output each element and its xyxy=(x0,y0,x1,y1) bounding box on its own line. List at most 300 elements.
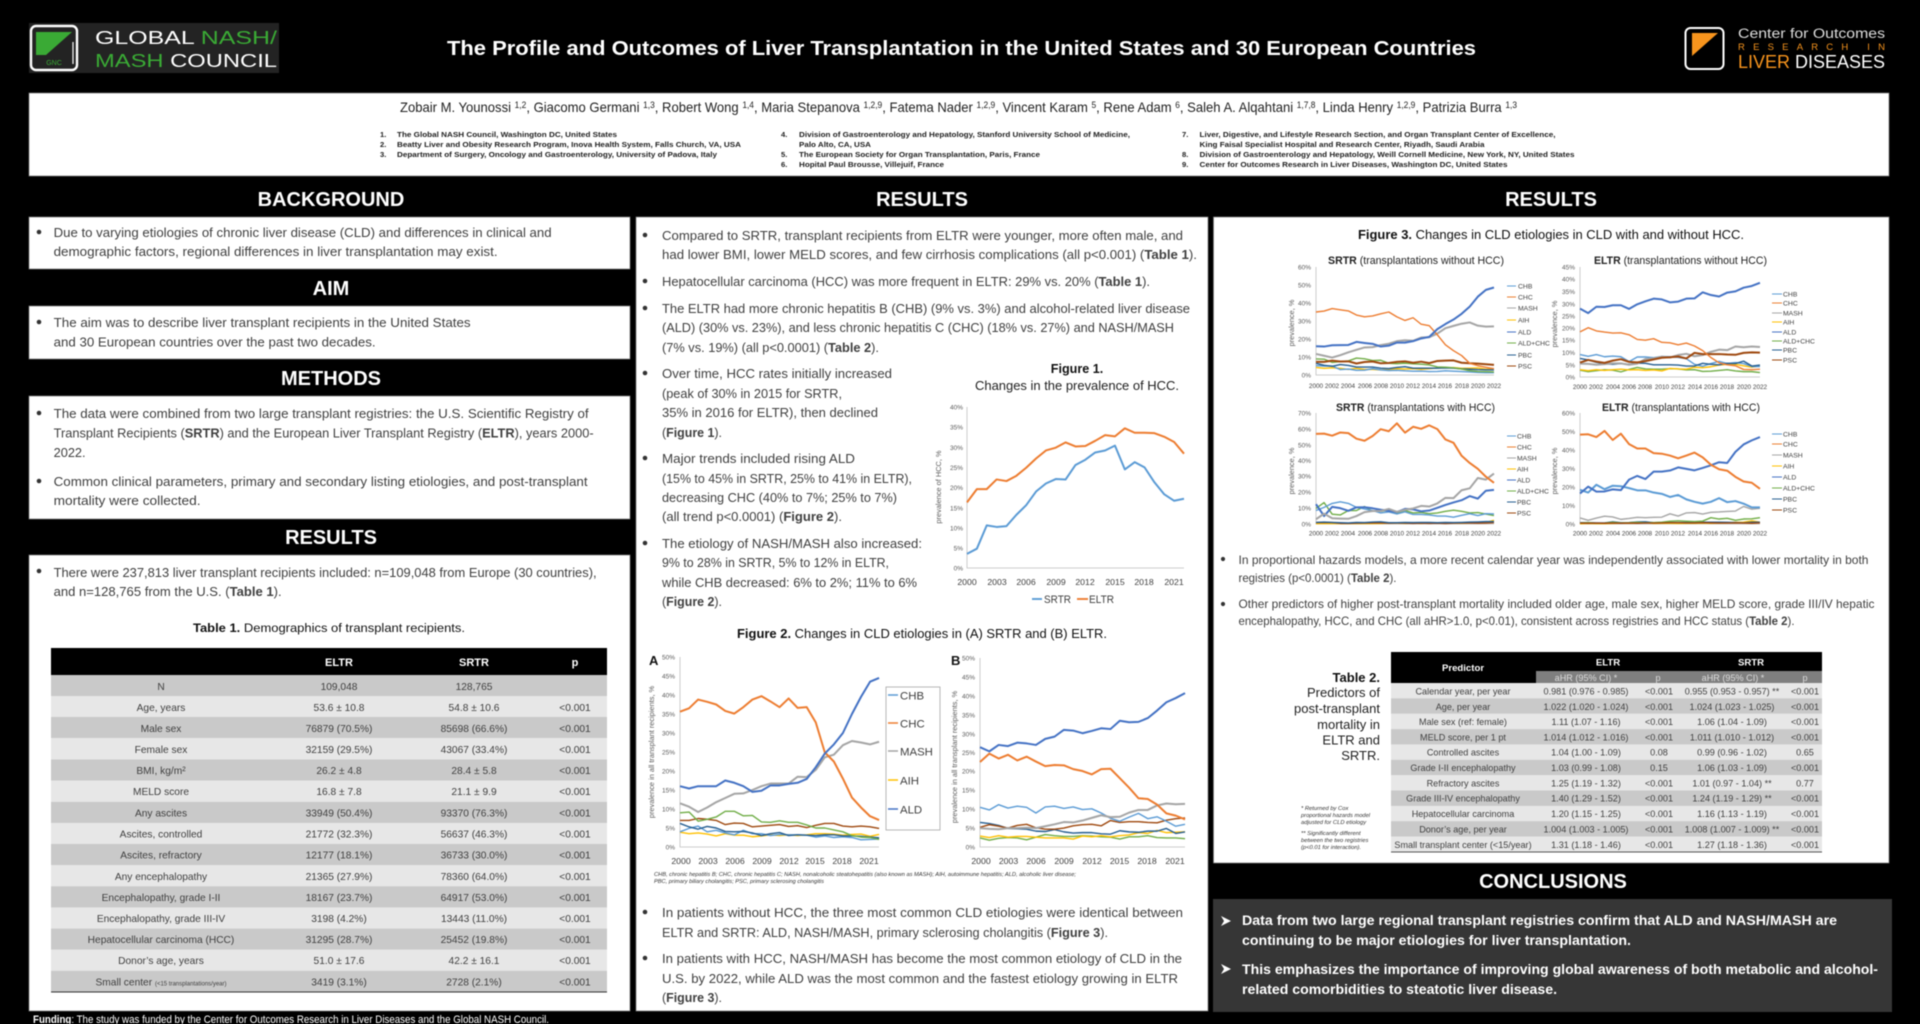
chart: figure 2B ELTR: 10% xyxy=(962,806,975,814)
authors: 1,2,9 xyxy=(864,100,882,110)
chart: SRTR with HCC: 2008 xyxy=(1374,530,1389,538)
panel: methods xyxy=(29,396,630,519)
chart: SRTR without HCC: 10% xyxy=(1298,354,1311,362)
table 1: demographics: Hepatocellular carcinoma (HCC) xyxy=(88,935,234,946)
line: MASH xyxy=(980,804,1185,829)
line: PBC xyxy=(1580,358,1760,366)
legend: PSC xyxy=(1783,508,1797,514)
table 1: demographics: 93370 (76.3%) xyxy=(441,808,507,820)
legend: figure 2: MASH xyxy=(900,746,933,758)
legend: ALD xyxy=(1517,478,1530,484)
chart: SRTR with HCC: SRTR (transplantations with HCC) xyxy=(1336,402,1495,414)
chart: ELTR with HCC: 2006 xyxy=(1622,530,1637,538)
legend: figure 2: CHC xyxy=(900,718,925,730)
legend: PBC xyxy=(1783,348,1797,354)
table 1: demographics: 76879 (70.5%) xyxy=(306,724,372,735)
heading: methods: METHODS xyxy=(281,368,381,390)
table 2 title: ELTR and xyxy=(1322,732,1380,748)
chart: figure 2B ELTR: 5% xyxy=(966,826,975,832)
chart: SRTR with HCC: 2000 xyxy=(1309,530,1324,538)
authors: , Maria Stepanova xyxy=(754,99,864,115)
text block: trends bullets: (all trend p<0.0001) (Figure 2). xyxy=(662,509,842,524)
table 2: predictors of mortality: <0.001 xyxy=(1645,686,1673,696)
table 1: demographics: Ascites, controlled xyxy=(120,830,203,840)
line: CHB xyxy=(1316,366,1494,373)
chart: SRTR with HCC: 2002 xyxy=(1325,530,1340,538)
chart: SRTR with HCC: 2006 xyxy=(1358,530,1373,538)
line: PBC xyxy=(1316,363,1494,370)
line: PSC xyxy=(680,818,879,828)
panel: conclusions: This emphasizes the importance of improving global awareness of both metabolic and alcohol- xyxy=(1242,962,1878,977)
affiliations column 2: Division of Gastroenterology and Hepatology, Stanford University School of Medicine, xyxy=(799,130,1130,139)
panel: aim xyxy=(29,306,630,359)
table 1: demographics: <0.001 xyxy=(559,808,591,820)
table 1: demographics: 26.2 ± 4.8 xyxy=(316,766,362,777)
figure 2 footnote xyxy=(654,872,1076,885)
heading: aim: AIM xyxy=(313,278,349,300)
chart: figure 2B ELTR: 40% xyxy=(962,694,975,700)
chart: ELTR without HCC: 2014 xyxy=(1688,384,1703,391)
panel: conclusions: continuing to be major etiologies for liver transplantation. xyxy=(1242,933,1631,948)
chart: figure 2B ELTR: 2015 xyxy=(1110,856,1129,866)
chart: figure 1 HCC prevalence: 35% xyxy=(950,424,963,432)
authors: , Saleh A. Alqahtani xyxy=(1180,99,1297,115)
line: ALD xyxy=(680,678,879,792)
chart: SRTR without HCC: 2018 xyxy=(1455,383,1470,390)
table 2: predictors of mortality: 1.03 (0.99 - 1.08) xyxy=(1551,763,1621,773)
chart: figure 2A SRTR: 2006 xyxy=(725,856,745,866)
legend: CHC xyxy=(1783,300,1798,308)
text block: comparison bullets xyxy=(643,228,1197,355)
table 1: demographics: Donor’s age, years xyxy=(118,956,204,967)
table 2: predictors of mortality: 0.99 (0.96 - 1.02) xyxy=(1697,748,1767,758)
line: AIH xyxy=(980,830,1185,839)
authors: 1,3 xyxy=(1505,100,1517,110)
table 2: predictors of mortality: <0.001 xyxy=(1791,824,1819,834)
line: ALD+CHC xyxy=(1580,367,1760,373)
table 1: demographics: <0.001 xyxy=(559,978,591,988)
chart: ELTR with HCC: 0% xyxy=(1566,522,1575,528)
chart: figure 1 HCC prevalence: 2015 xyxy=(1105,577,1125,587)
table 2: predictors of mortality: 1.40 (1.29 - 1.52) xyxy=(1551,794,1621,804)
authors: , Giacomo Germani xyxy=(526,99,643,115)
table 2: predictors of mortality: 1.011 (1.010 - 1.012) xyxy=(1690,732,1774,742)
table 1: demographics: 25452 (19.8%) xyxy=(441,935,507,946)
chart: SRTR without HCC: 60% xyxy=(1298,264,1311,272)
table 2: predictors of mortality: 1.24 (1.19 - 1.29) ** xyxy=(1692,794,1772,804)
table 1: demographics: 109,048 xyxy=(321,682,358,693)
line: PBC xyxy=(680,823,879,838)
panel: methods: 2022. xyxy=(54,445,86,460)
table 2: predictors of mortality: 1.25 (1.19 - 1.32) xyxy=(1551,778,1621,788)
table 2: predictors of mortality: <0.001 xyxy=(1791,702,1819,712)
authors: , Robert Wong xyxy=(655,99,742,115)
authors: 1,4 xyxy=(742,100,754,110)
line: AIH xyxy=(1580,364,1760,371)
chart: figure 2A SRTR: 25% xyxy=(662,750,675,756)
line: ALD+CHC xyxy=(1580,518,1760,523)
legend: PSC xyxy=(1518,364,1532,370)
chart: figure 2B ELTR: 20% xyxy=(962,768,975,776)
table 2: predictors of mortality: 1.06 (1.03 - 1.09) xyxy=(1697,763,1767,773)
table 2 notes: proportional hazards model xyxy=(1300,813,1371,819)
line: PSC xyxy=(1580,522,1760,524)
chart: SRTR with HCC: 2022 xyxy=(1487,530,1502,538)
chart: figure 1 HCC prevalence: 15% xyxy=(950,506,963,512)
text block: proportional hazards bullets: encephalopathy, HCC, and CHC (all aHR>1.0, p<0.01), consistent across registries and HCC status (Table 2). xyxy=(1238,615,1794,628)
table 2: predictors of mortality: 1.01 (0.97 - 1.04) ** xyxy=(1692,778,1772,788)
table 2: predictors of mortality: MELD score, per 1 pt xyxy=(1420,732,1506,742)
table 2 notes xyxy=(1300,806,1371,851)
panel: results left xyxy=(29,555,630,1011)
table 1: demographics: 21365 (27.9%) xyxy=(306,872,372,883)
table 1: demographics: Female sex xyxy=(135,745,187,756)
line: MASH xyxy=(1316,474,1494,519)
authors: 5 xyxy=(1091,100,1096,110)
heading: results middle: RESULTS xyxy=(876,189,968,211)
authors: 6 xyxy=(1175,100,1180,110)
table 1: demographics: 28.4 ± 5.8 xyxy=(451,766,497,777)
affiliations column 3: Center for Outcomes Research in Liver Diseases, Washington DC, United States xyxy=(1200,160,1508,169)
figure 2 footnote: CHB, chronic hepatitis B; CHC, chronic hepatitis C; NASH, nonalcoholic steatohepatitis (also known as MASH); AIH, autoimmune hepatitis; ALD, alcoholic liver disease; xyxy=(654,872,1076,878)
chart: SRTR without HCC: SRTR (transplantations without HCC) xyxy=(1328,255,1504,267)
table 1: demographics: Age, years xyxy=(137,703,185,714)
chart: SRTR without HCC: 30% xyxy=(1298,318,1311,326)
authors: 1,2,9 xyxy=(977,100,995,110)
chart: ELTR with HCC: 60% xyxy=(1562,410,1575,418)
table 1: demographics: 54.8 ± 10.6 xyxy=(449,703,500,714)
legend: PBC xyxy=(1517,500,1531,506)
table 1 title: Table 1. Demographics of transplant recipients. xyxy=(193,621,465,635)
legend: ALD xyxy=(1783,474,1796,482)
text block: HCC etiology bullets: In patients with HCC, NASH/MASH has become the most common etiology of CLD in the xyxy=(662,951,1182,966)
chart: ELTR without HCC: 15% xyxy=(1562,338,1575,344)
chart: ELTR without HCC: 0% xyxy=(1566,374,1575,382)
table 1: demographics: 33949 (50.4%) xyxy=(306,808,372,820)
table 2 notes: adjusted for CLD etiology xyxy=(1301,820,1367,826)
table 2: predictors of mortality: <0.001 xyxy=(1791,717,1819,727)
line: MASH xyxy=(1580,506,1760,520)
line: PSC xyxy=(1580,352,1760,363)
chart: ELTR without HCC: 2022 xyxy=(1753,384,1768,391)
panel: methods: The data were combined from two large transplant registries: the U.S. Scientific Registry of xyxy=(54,406,589,421)
table 1: demographics: <0.001 xyxy=(559,935,591,946)
text block: proportional hazards bullets: In proportional hazards models, a more recent calendar year was independently associated with lower mortality in both xyxy=(1238,554,1868,567)
affiliations column 1: Department of Surgery, Oncology and Gastroenterology, University of Padova, Italy xyxy=(397,150,718,159)
legend: MASH xyxy=(1783,452,1803,460)
affiliations column 2 xyxy=(781,130,1130,169)
text block: HCC etiology bullets: ELTR and SRTR: ALD, NASH/MASH, primary sclerosing cholangitis (Figure 3). xyxy=(662,925,1108,940)
legend: ALD+CHC xyxy=(1783,486,1815,492)
legend xyxy=(1507,284,1550,370)
legend: figure 1 xyxy=(1032,594,1114,606)
chart: ELTR without HCC: 2006 xyxy=(1622,384,1637,391)
title: The Profile and Outcomes of Liver Transplantation in the United States and 30 European Countries xyxy=(447,37,1476,60)
table 1: demographics: SRTR xyxy=(459,657,489,669)
table 2 notes: between the two registries xyxy=(1301,838,1368,844)
chart: figure 2B ELTR: 2000 xyxy=(971,856,991,866)
table 1: demographics: <0.001 xyxy=(559,830,591,840)
affiliations column 3 xyxy=(1182,130,1574,169)
legend: AIH xyxy=(1783,464,1794,470)
table 2: predictors of mortality: <0.001 xyxy=(1791,840,1819,850)
legend: MASH xyxy=(1518,306,1538,312)
chart: figure 2B ELTR: B xyxy=(951,653,960,668)
legend: figure 1: ELTR xyxy=(1089,594,1114,606)
table 2: predictors of mortality: Hepatocellular carcinoma xyxy=(1412,809,1515,819)
chart: ELTR with HCC: 2008 xyxy=(1638,530,1653,538)
chart: figure 2A SRTR: 50% xyxy=(662,654,675,662)
table 2: predictors of mortality: Age, per year xyxy=(1436,702,1490,712)
line: CHC xyxy=(1316,423,1494,483)
chart: ELTR without HCC: 2004 xyxy=(1606,384,1621,391)
panel: results right xyxy=(1214,217,1889,863)
chart: SRTR without HCC: 2008 xyxy=(1374,383,1389,390)
figure 1 title: Changes in the prevalence of HCC. xyxy=(975,379,1179,393)
line: ALD xyxy=(980,693,1185,751)
line: ALD xyxy=(1316,288,1494,347)
line: AIH xyxy=(1316,367,1494,370)
affiliations column 2: The European Society for Organ Transplantation, Paris, France xyxy=(799,150,1040,159)
table 2: predictors of mortality: p xyxy=(1655,673,1661,683)
chart: figure 2A SRTR: 2012 xyxy=(779,856,799,866)
table 2: predictors of mortality: 1.11 (1.07 - 1.16) xyxy=(1551,717,1621,727)
chart: figure 2A SRTR: 45% xyxy=(662,674,675,680)
table 1: demographics: 21772 (32.3%) xyxy=(306,830,372,840)
text block: comparison bullets: (ALD) (30% vs. 23%), and less chronic hepatitis C (CHC) (18% vs. 27%) and NASH/MASH xyxy=(662,320,1174,335)
table 1: demographics: 78360 (64.0%) xyxy=(441,872,507,883)
chart: figure 2B ELTR: 2003 xyxy=(999,856,1018,866)
table 2: predictors of mortality: <0.001 xyxy=(1645,778,1673,788)
table 2: predictors of mortality: <0.001 xyxy=(1645,809,1673,819)
line: AIH xyxy=(1580,521,1760,524)
affiliations column 2: 5. xyxy=(781,150,787,159)
text block: trends bullets: Over time, HCC rates initially increased xyxy=(662,366,892,381)
heading: results left: RESULTS xyxy=(285,527,377,549)
text block: proportional hazards bullets: Other predictors of higher post-transplant mortality included older age, male sex, higher MELD score, grade III/IV hepatic xyxy=(1238,598,1875,611)
chart: figure 2A SRTR: 20% xyxy=(662,768,675,776)
panel: aim: The aim was to describe liver transplant recipients in the United States xyxy=(54,315,471,330)
legend: CHB xyxy=(1518,284,1533,290)
authors: , Rene Adam xyxy=(1096,99,1175,115)
table 2 title: Predictors of xyxy=(1307,685,1380,700)
table 2: predictors of mortality: <0.001 xyxy=(1791,794,1819,804)
chart: SRTR with HCC: 2014 xyxy=(1422,530,1437,538)
chart: ELTR without HCC: 2018 xyxy=(1720,384,1735,391)
table 1: demographics: <0.001 xyxy=(559,766,591,777)
table 2: predictors of mortality: Calendar year, per year xyxy=(1415,686,1511,696)
chart: SRTR without HCC: 2012 xyxy=(1406,383,1421,390)
logo: Center for Outcomes Research in Liver Diseases xyxy=(1686,26,1885,72)
chart: SRTR with HCC: 2016 xyxy=(1438,530,1453,538)
line: ELTR xyxy=(967,428,1184,502)
legend: MASH xyxy=(1783,310,1803,318)
chart: SRTR with HCC: 10% xyxy=(1298,506,1311,512)
legend: ALD+CHC xyxy=(1517,488,1549,496)
figure 1 title: Figure 1. xyxy=(1051,362,1103,376)
chart: ELTR without HCC: 30% xyxy=(1562,302,1575,308)
text block: trends bullets: (Figure 1). xyxy=(662,425,722,440)
table 1: demographics: 16.8 ± 7.8 xyxy=(316,787,362,798)
legend: CHC xyxy=(1517,444,1532,452)
chart: figure 2B ELTR: 45% xyxy=(962,674,975,682)
chart: SRTR with HCC: prevalence, % xyxy=(1287,447,1296,494)
table 2: predictors of mortality: 0.08 xyxy=(1650,748,1668,758)
table 1: demographics: 21.1 ± 9.9 xyxy=(451,787,497,798)
chart: figure 1 HCC prevalence: 0% xyxy=(954,566,963,572)
chart: SRTR without HCC: 40% xyxy=(1298,300,1311,308)
table 2: predictors of mortality: 0.981 (0.976 - 0.985) xyxy=(1544,686,1628,696)
table 1: demographics: 2728 (2.1%) xyxy=(446,978,502,988)
legend: CHB xyxy=(1783,432,1798,438)
panel: methods: Transplant Recipients (SRTR) and the European Liver Transplant Registry (ELTR), years 2000- xyxy=(54,426,594,440)
chart: figure 2B ELTR: 15% xyxy=(962,788,975,794)
text block: trends bullets: while CHB decreased: 6% to 2%; 11% to 6% xyxy=(661,575,917,590)
line: CHC xyxy=(680,696,879,820)
chart: SRTR with HCC: 30% xyxy=(1298,474,1311,480)
chart: SRTR with HCC: 2012 xyxy=(1406,530,1421,538)
authors: 1,7,8 xyxy=(1297,100,1315,110)
chart: SRTR without HCC xyxy=(1287,255,1550,390)
chart: ELTR without HCC: 10% xyxy=(1562,350,1575,357)
legend: ALD xyxy=(1518,330,1531,336)
chart: figure 1 HCC prevalence: 10% xyxy=(950,526,963,532)
chart: figure 2A SRTR: 2003 xyxy=(698,856,718,866)
text block: HCC etiology bullets: (Figure 3). xyxy=(662,990,722,1005)
chart: figure 2A SRTR: 2000 xyxy=(671,856,691,866)
table 2 notes: (p<0.01 for interaction). xyxy=(1301,845,1361,851)
chart: figure 1 HCC prevalence: 2000 xyxy=(957,577,977,587)
line: MASH xyxy=(680,741,879,812)
chart: figure 1 HCC prevalence: 20% xyxy=(950,485,963,492)
chart: ELTR with HCC: 2018 xyxy=(1720,530,1735,538)
text block: HCC etiology bullets: In patients without HCC, the three most common CLD etiologies were identical between xyxy=(662,905,1183,920)
line: ALD+CHC xyxy=(1316,503,1494,516)
chart: ELTR with HCC: 30% xyxy=(1562,466,1575,473)
affiliations column 1: The Global NASH Council, Washington DC, United States xyxy=(397,130,617,139)
legend: figure 2: CHB xyxy=(900,690,924,702)
affiliations column 3: 7. xyxy=(1182,130,1188,139)
panel: conclusions: related comorbidities to steatotic liver disease. xyxy=(1242,982,1557,997)
figure 2 title: Figure 2. Changes in CLD etiologies in (A) SRTR and (B) ELTR. xyxy=(737,627,1107,641)
text block: trends bullets: (Figure 2). xyxy=(662,594,722,609)
table 2: predictors of mortality: 1.004 (1.003 - 1.005) xyxy=(1544,824,1628,834)
chart: ELTR without HCC: 5% xyxy=(1566,362,1575,370)
text block: recipients: and n=128,765 from the U.S. ( Table 1). xyxy=(54,584,282,599)
table 2: predictors of mortality: 0.65 xyxy=(1796,748,1814,758)
chart: figure 2B ELTR: 35% xyxy=(962,712,975,720)
text block: comparison bullets: had lower BMI, lower MELD scores, and few cirrhosis complications (all p<0.001) ( Table 1). xyxy=(662,247,1197,262)
text block: HCC etiology bullets xyxy=(643,905,1183,1005)
chart: figure 1 HCC prevalence: 30% xyxy=(950,445,963,452)
chart: figure 2A SRTR: 2009 xyxy=(752,856,772,866)
logo: Center for Outcomes Research in Liver Diseases: LIVER DISEASES xyxy=(1738,52,1885,72)
table 2: predictors of mortality: 1.20 (1.15 - 1.25) xyxy=(1551,809,1621,819)
table 1: demographics: 32159 (29.5%) xyxy=(306,745,372,756)
table 2: predictors of mortality: <0.001 xyxy=(1645,717,1673,727)
chart: figure 2A SRTR xyxy=(647,653,940,866)
line: CHC xyxy=(980,754,1185,819)
table 2: predictors of mortality: Male sex (ref: female) xyxy=(1419,717,1507,727)
chart: ELTR with HCC: 2012 xyxy=(1671,530,1686,538)
chart: SRTR with HCC: 2020 xyxy=(1471,530,1486,538)
chart: figure 2A SRTR: 5% xyxy=(666,826,675,832)
chart: figure 2A SRTR: 0% xyxy=(666,844,675,852)
chart: ELTR without HCC: 40% xyxy=(1562,276,1575,284)
chart: SRTR with HCC: 2018 xyxy=(1455,530,1470,538)
text block: comparison bullets: Hepatocellular carcinoma (HCC) was more frequent in ELTR: 29% vs. 20% ( Table 1). xyxy=(662,274,1150,289)
legend xyxy=(1507,434,1549,518)
table 2: predictors of mortality: <0.001 xyxy=(1791,732,1819,742)
table 1: demographics: Male sex xyxy=(141,724,181,735)
chart: ELTR without HCC xyxy=(1550,255,1815,391)
text block: comparison bullets: (7% vs. 19%) (all p<0.0001) (Table 2). xyxy=(662,340,879,355)
chart: ELTR with HCC: ELTR (transplantations with HCC) xyxy=(1602,402,1760,414)
chart: SRTR with HCC: 60% xyxy=(1298,426,1311,434)
chart: figure 2A SRTR: 2021 xyxy=(859,856,879,866)
text block: trends bullets: 9% to 28% in SRTR, 5% to 12% in ELTR, xyxy=(662,555,889,570)
table 2: predictors of mortality: 1.008 (1.007 - 1.009) ** xyxy=(1685,824,1780,834)
affiliations column 1 xyxy=(380,130,742,159)
table 2 title: Table 2. xyxy=(1333,670,1380,685)
table 2: predictors of mortality: Grade III-IV encephalopathy xyxy=(1406,794,1520,804)
chart: ELTR with HCC xyxy=(1550,402,1815,538)
chart: SRTR without HCC: 2010 xyxy=(1390,383,1405,390)
table 2: predictors of mortality: <0.001 xyxy=(1645,794,1673,804)
chart: figure 1 HCC prevalence: 2012 xyxy=(1075,577,1095,587)
logo: Global NASH/MASH Council xyxy=(29,23,279,73)
legend: PSC xyxy=(1783,358,1797,364)
chart: SRTR without HCC: 20% xyxy=(1298,336,1311,344)
chart: ELTR without HCC: 2008 xyxy=(1638,384,1653,391)
chart: SRTR with HCC: 70% xyxy=(1298,410,1311,418)
logo: Global NASH/MASH Council: GLOBAL NASH/ xyxy=(95,28,277,48)
authors: Zobair M. Younossi xyxy=(400,99,519,115)
legend xyxy=(1772,292,1815,364)
table 2: predictors of mortality: SRTR xyxy=(1738,658,1764,668)
authors: , Vincent Karam xyxy=(995,99,1091,115)
legend xyxy=(1772,432,1815,514)
legend: CHC xyxy=(1518,294,1533,302)
table 1: demographics: 42.2 ± 16.1 xyxy=(449,956,500,967)
table 2: predictors of mortality xyxy=(1391,652,1822,852)
text block: recipients: There were 237,813 liver transplant recipients included: n=109,048 from Europe (30 countries), xyxy=(54,565,597,580)
chart: figure 2A SRTR: 15% xyxy=(662,788,675,794)
chart: SRTR with HCC: 20% xyxy=(1298,490,1311,496)
chart: figure 2A SRTR: 2015 xyxy=(805,856,825,866)
affiliations column 2: 4. xyxy=(781,130,787,139)
table 2 title: mortality in xyxy=(1317,717,1380,732)
table 1: demographics: <0.001 xyxy=(559,893,591,904)
chart: ELTR without HCC: 2010 xyxy=(1655,384,1670,391)
line: PSC xyxy=(1316,360,1494,365)
legend: figure 2: ALD xyxy=(900,804,922,816)
authors: 1,2,9 xyxy=(1397,100,1415,110)
table 2: predictors of mortality: <0.001 xyxy=(1645,732,1673,742)
chart: SRTR without HCC: 2022 xyxy=(1487,383,1502,390)
chart: ELTR with HCC: 2014 xyxy=(1688,530,1703,538)
chart: SRTR with HCC: 2004 xyxy=(1341,530,1356,538)
chart: ELTR with HCC: 2016 xyxy=(1704,530,1719,538)
table 1: demographics: Any encephalopathy xyxy=(115,872,208,883)
legend: CHB xyxy=(1783,292,1798,298)
legend: PSC xyxy=(1517,510,1531,518)
table 1: demographics: N xyxy=(157,682,165,693)
table 2 title: post-transplant xyxy=(1294,701,1380,716)
table 1: demographics: Ascites, refractory xyxy=(120,850,203,862)
chart: SRTR with HCC: 0% xyxy=(1302,522,1311,528)
affiliations column 3: 8. xyxy=(1182,150,1188,159)
